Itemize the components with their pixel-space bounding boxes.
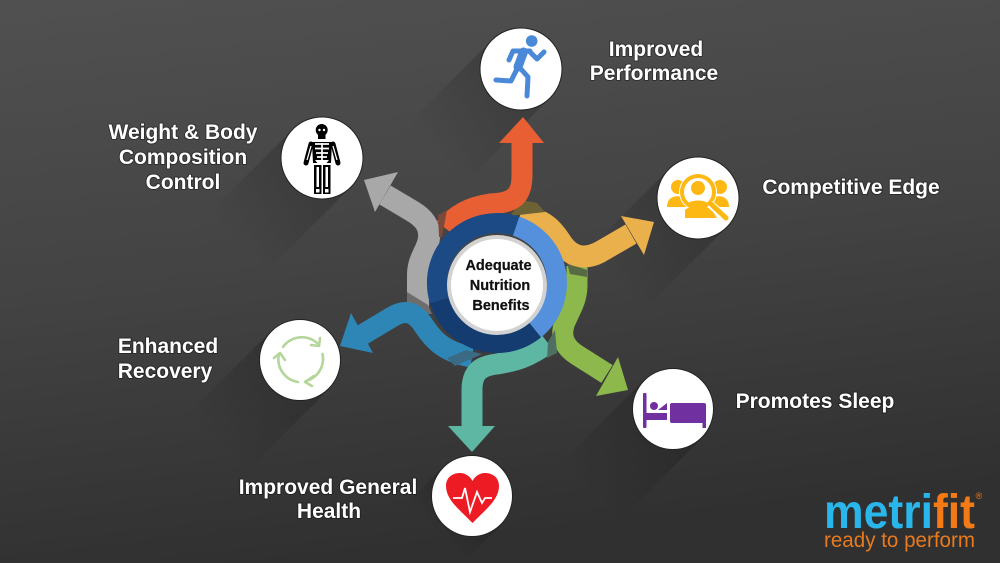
- circle: body composition: [281, 117, 363, 199]
- centre disc: [449, 237, 545, 333]
- arrow: blue to recovery: [340, 312, 482, 366]
- label: competitive edge: Competitive Edge: [762, 176, 940, 199]
- centre title: Nutrition: [470, 278, 530, 294]
- logo: metrifit: ®: [976, 491, 983, 501]
- label: recovery: Recovery: [118, 360, 213, 383]
- label: recovery: Enhanced: [118, 335, 218, 358]
- arrow: grey to body composition: [364, 172, 432, 314]
- icon: skeleton: [306, 124, 338, 194]
- arrow: green to sleep: [547, 263, 628, 396]
- icon: people with magnifier: [667, 173, 729, 218]
- circle: general health: [432, 456, 512, 536]
- circle: sleep: [632, 368, 714, 450]
- arrow: yellow to competitive edge: [510, 200, 654, 256]
- centre title: Adequate: [465, 258, 532, 274]
- icon: bed: [643, 393, 706, 428]
- label: general health: Improved General: [239, 476, 417, 499]
- centre ring: [427, 213, 567, 353]
- circle: performance: [480, 28, 562, 110]
- ring segment: navy: [430, 298, 541, 353]
- circle: recovery: [260, 320, 340, 400]
- label: body composition: Composition: [119, 146, 247, 169]
- label: body composition: Control: [146, 171, 220, 194]
- circle: competitive edge: [657, 157, 739, 239]
- ring segment: light blue: [513, 217, 567, 337]
- icon: heart with pulse: [446, 473, 499, 523]
- arrow: teal to general health: [448, 343, 548, 452]
- logo: metrifit: metrifit: [824, 486, 975, 539]
- centre title: [465, 258, 532, 314]
- arrow: orange to performance: [438, 117, 544, 237]
- label: performance: Improved: [609, 38, 703, 61]
- logo: metrifit: ready to perform: [824, 529, 975, 552]
- label: body composition: Weight & Body: [109, 121, 258, 144]
- label: performance: Performance: [590, 62, 718, 85]
- icon: cycle arrows: [274, 337, 323, 386]
- icon: runner: [496, 35, 544, 96]
- centre title: Benefits: [472, 298, 530, 314]
- label: general health: Health: [297, 500, 361, 523]
- circle long shadows: [186, 40, 727, 562]
- ring segment: dark blue: [427, 213, 519, 304]
- label: sleep: Promotes Sleep: [736, 390, 894, 413]
